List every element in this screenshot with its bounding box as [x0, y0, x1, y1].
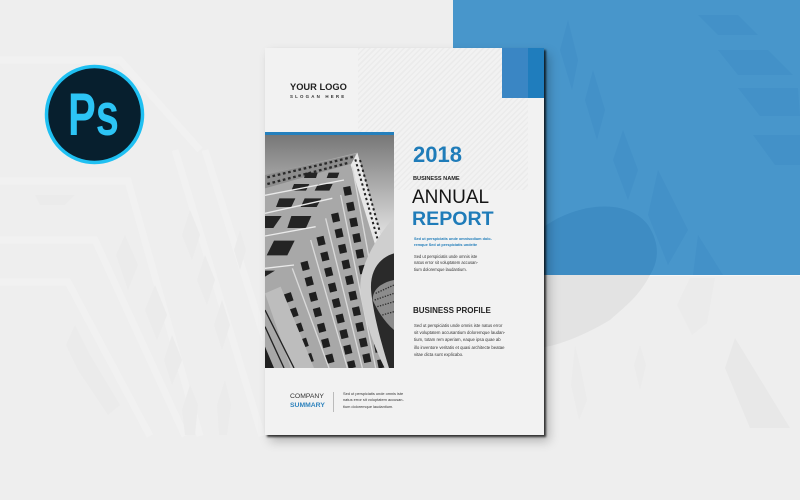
blue corner block: [502, 48, 544, 98]
blue intro text: [414, 237, 492, 247]
summary text: natus error sit voluptatem accusan-: [343, 397, 404, 402]
blue background panel: [453, 0, 800, 346]
business profile text: Sed ut perspiciatis unde omnis iste natus error: [414, 323, 502, 328]
business profile text: vitae dicta sunt explicabo.: [414, 352, 463, 357]
company summary: [290, 393, 325, 409]
blue intro text: remque Sed ut perspiciatis undeite: [414, 243, 477, 247]
blue bar above photo: [265, 132, 394, 135]
logo: YOUR LOGO: [290, 82, 347, 92]
title: annual report: ANNUAL: [412, 187, 489, 208]
heading: business profile: BUSINESS PROFILE: [413, 306, 491, 315]
logo: [290, 82, 347, 99]
business profile text: [414, 323, 505, 357]
business profile text: tium, totam rem aperiam, eaque ipsa quae ab: [414, 337, 501, 342]
intro text: [414, 254, 478, 272]
company summary: COMPANY: [290, 393, 324, 400]
icon: Photoshop logo: [44, 64, 144, 164]
summary text: tium doloremque laudantium.: [343, 404, 393, 409]
building photo: [265, 135, 394, 368]
divider: [333, 392, 334, 412]
business profile text: illo inventore veritatis et quasi architecte beatae: [414, 345, 505, 350]
report cover: [265, 48, 544, 435]
tower: [265, 153, 389, 368]
business name: BUSINESS NAME: [413, 176, 460, 182]
summary text: [343, 391, 404, 409]
blue intro text: Sed ut perspiciatis unde omnisodium dolo-: [414, 237, 492, 241]
facade diamonds: [287, 187, 382, 368]
reflective sphere: [360, 217, 394, 368]
striped texture panel: [358, 48, 528, 190]
year: 2018: [413, 142, 462, 167]
company summary: SUMMARY: [290, 402, 325, 409]
title: annual report: REPORT: [412, 208, 494, 230]
narrow side face: [351, 153, 381, 247]
intro text: Sed ut perspiciatis unde omnis iste: [414, 254, 477, 259]
logo: SLOGAN HERE: [290, 94, 346, 99]
intro text: tium doloremque laudantium.: [414, 267, 467, 272]
intro text: natus error sit voluptatem accusan-: [414, 260, 478, 265]
icon: Photoshop logo: Ps: [68, 81, 119, 148]
title: annual report: [412, 187, 494, 230]
business profile text: sit voluptatem accusantium doloremque laudan-: [414, 330, 505, 335]
summary text: Sed ut perspiciatis unde omnis iste: [343, 391, 403, 396]
large windows: [265, 173, 339, 277]
